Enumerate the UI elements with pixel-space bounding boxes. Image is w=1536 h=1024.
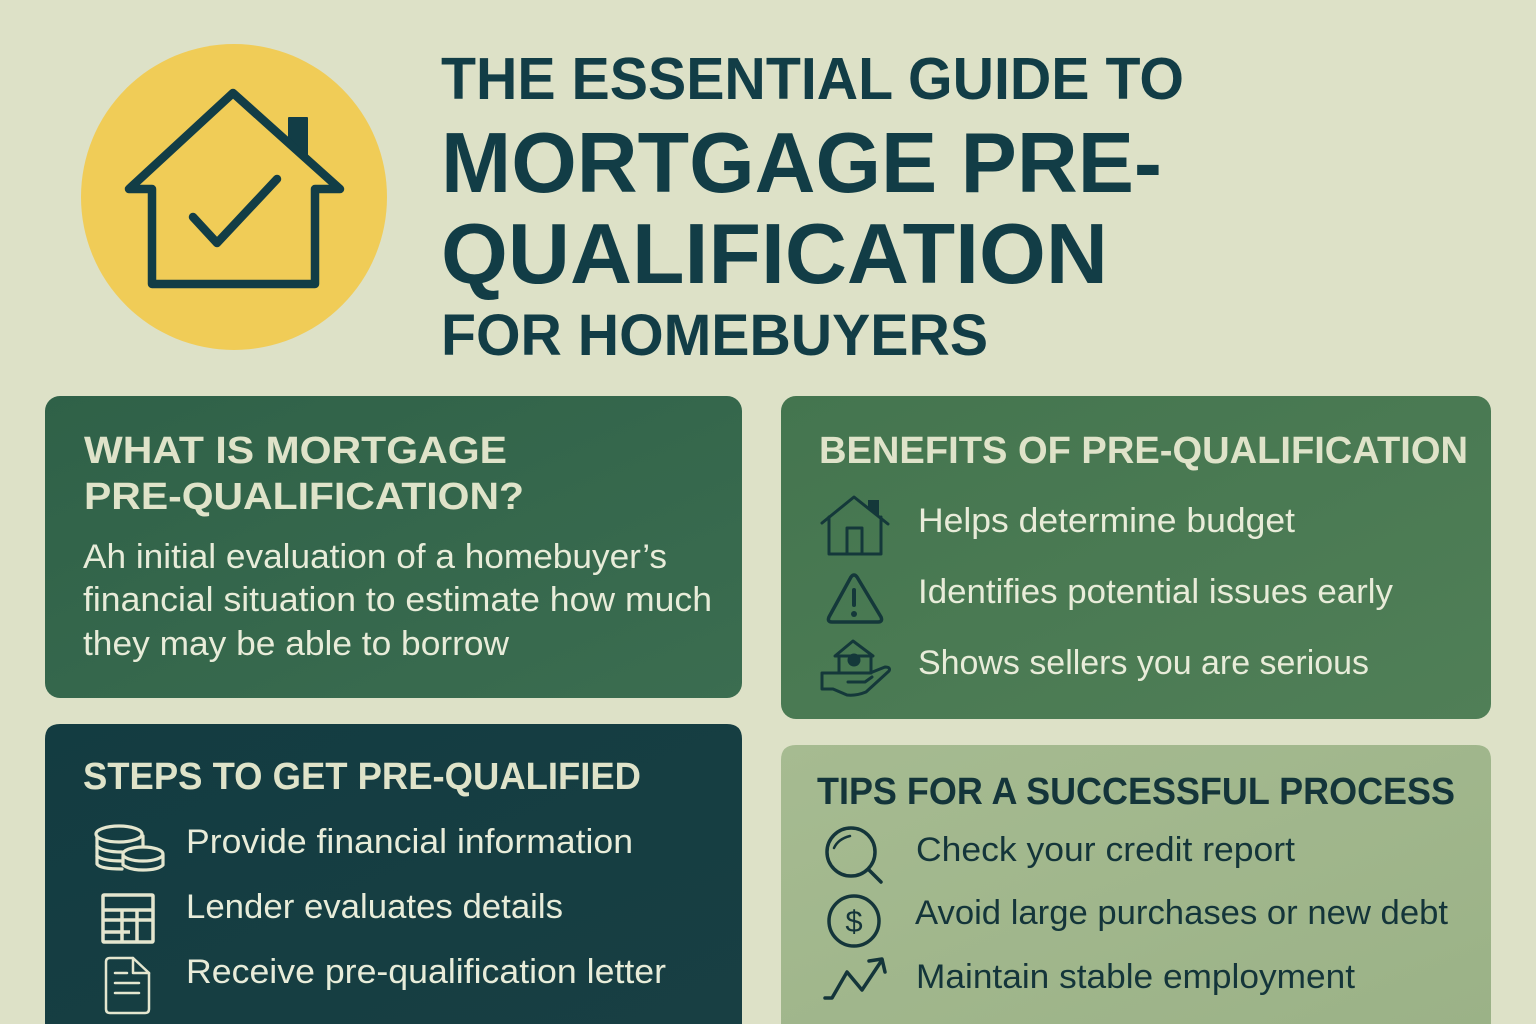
definition text	[83, 538, 712, 663]
title: THE ESSENTIAL GUIDE TO	[441, 46, 1184, 112]
icon: house	[822, 497, 888, 554]
icon: dollar coin: $	[845, 904, 863, 939]
panel: what is mortgage pre-qualification	[45, 396, 742, 698]
tip: avoid large purchases: Avoid large purchases or new debt	[915, 894, 1449, 932]
step: lender evaluates details: Lender evaluates details	[186, 888, 563, 926]
tip: maintain stable employment: Maintain stable employment	[916, 958, 1356, 996]
title: QUALIFICATION	[441, 207, 1108, 302]
definition text: they may be able to borrow	[83, 625, 509, 663]
heading: steps: STEPS TO GET PRE-QUALIFIED	[83, 756, 641, 798]
heading: what is	[84, 430, 524, 518]
panel: benefits of pre-qualification	[781, 396, 1491, 719]
definition text: financial situation to estimate how much	[83, 581, 712, 619]
icon: magnifying glass	[827, 828, 881, 882]
heading: what is: WHAT IS MORTGAGE	[84, 430, 507, 472]
panel: steps to get pre-qualified	[45, 724, 742, 1024]
icon: warning triangle	[828, 575, 882, 622]
icon: document	[106, 958, 149, 1013]
icon: dollar coin	[829, 896, 879, 946]
icon: table calculator	[103, 895, 153, 942]
icon: coins	[96, 826, 163, 870]
benefit: helps determine budget: Helps determine budget	[918, 502, 1296, 540]
icon: rising trend arrow	[825, 959, 885, 998]
tip: check your credit report: Check your credit report	[916, 831, 1296, 869]
step: receive pre-qualification letter: Receive pre-qualification letter	[186, 953, 666, 991]
definition text: Ah initial evaluation of a homebuyer’s	[83, 538, 667, 576]
title: MORTGAGE PRE-	[441, 116, 1162, 211]
icon: house with checkmark in yellow circle	[81, 44, 387, 350]
heading: tips: TIPS FOR A SUCCESSFUL PROCESS	[817, 771, 1455, 813]
step: provide financial information: Provide financial information	[186, 823, 633, 861]
benefit: identifies potential issues early: Identifies potential issues early	[918, 573, 1393, 611]
title: FOR HOMEBUYERS	[441, 303, 988, 368]
icon: house in hand	[822, 641, 890, 695]
title	[441, 46, 1184, 368]
heading: benefits: BENEFITS OF PRE-QUALIFICATION	[819, 430, 1468, 472]
benefit: shows sellers you are serious: Shows sellers you are serious	[918, 644, 1369, 682]
heading: what is: PRE-QUALIFICATION?	[84, 476, 524, 518]
panel: tips for a successful process	[781, 745, 1491, 1024]
